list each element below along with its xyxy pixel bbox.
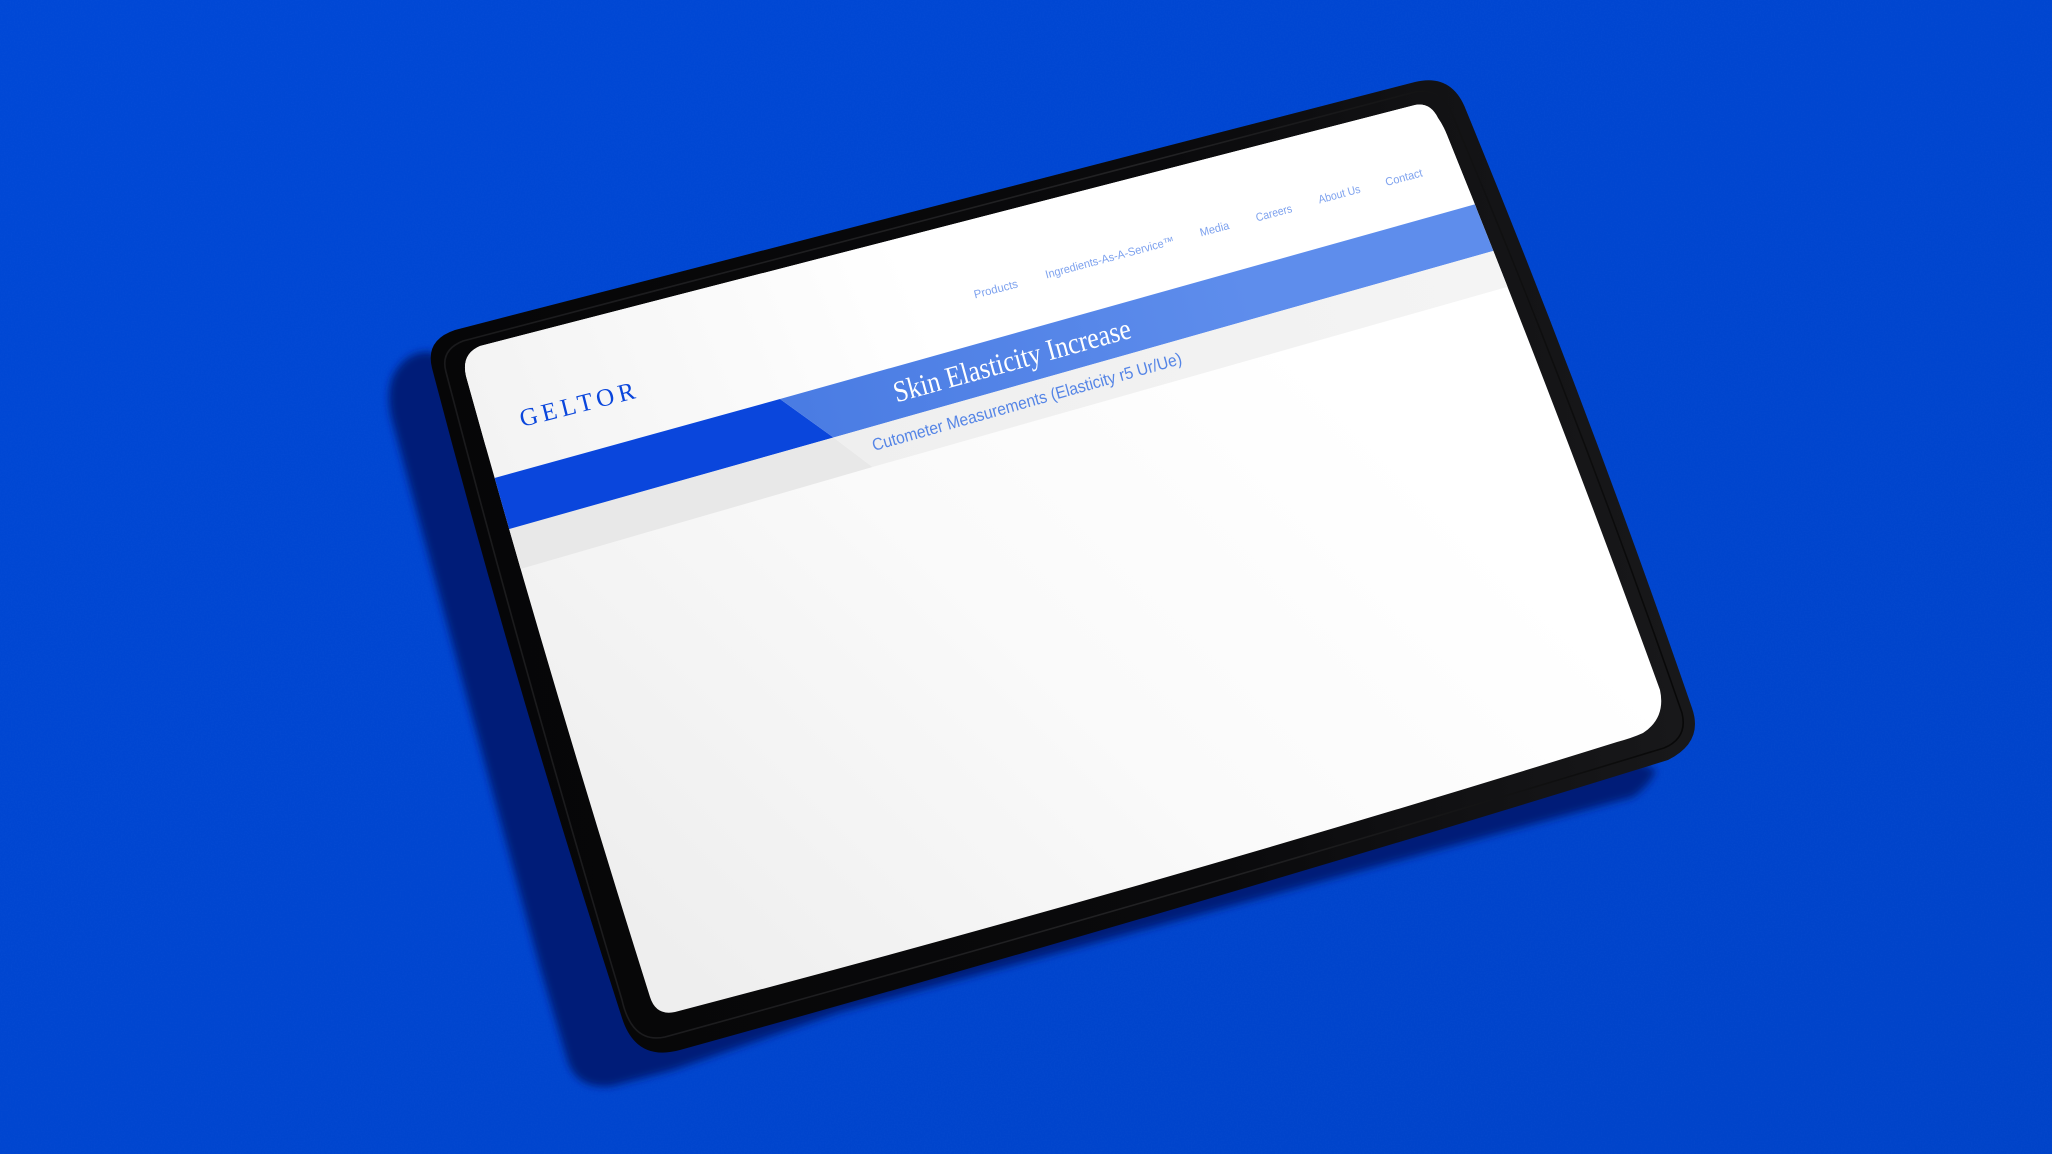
bezel groove line	[445, 91, 1683, 1038]
nav link: Ingredients-As-A-Service: Ingredients-As-A-Service™	[1044, 235, 1176, 281]
title band: light blue segment	[780, 204, 1520, 438]
tablet drop shadow	[389, 352, 1656, 1086]
tablet	[400, 60, 1720, 1060]
title band: dark blue segment	[480, 399, 834, 532]
nav link: Media: Media	[1199, 220, 1231, 239]
nav link: Products: Products	[973, 278, 1020, 301]
screen surface	[464, 104, 1662, 1013]
header area	[464, 104, 1477, 448]
sub band: light grey segment	[834, 240, 1530, 467]
nav link: Contact: Contact	[1384, 167, 1425, 189]
logo: GELTOR: GELTOR	[517, 378, 638, 433]
tablet bezel	[431, 80, 1695, 1053]
sub band: dark grey segment	[495, 438, 872, 572]
scene: tablet on blue background	[384, 80, 2052, 1154]
subtitle: Cutometer Measurements: Cutometer Measurements (Elasticity r5 Ur/Ue)	[870, 349, 1184, 455]
nav link: Careers: Careers	[1255, 203, 1294, 224]
title: Skin Elasticity Increase: Skin Elasticity Increase	[890, 312, 1135, 409]
screen	[464, 104, 1662, 1013]
nav link: About Us: About Us	[1317, 184, 1362, 206]
